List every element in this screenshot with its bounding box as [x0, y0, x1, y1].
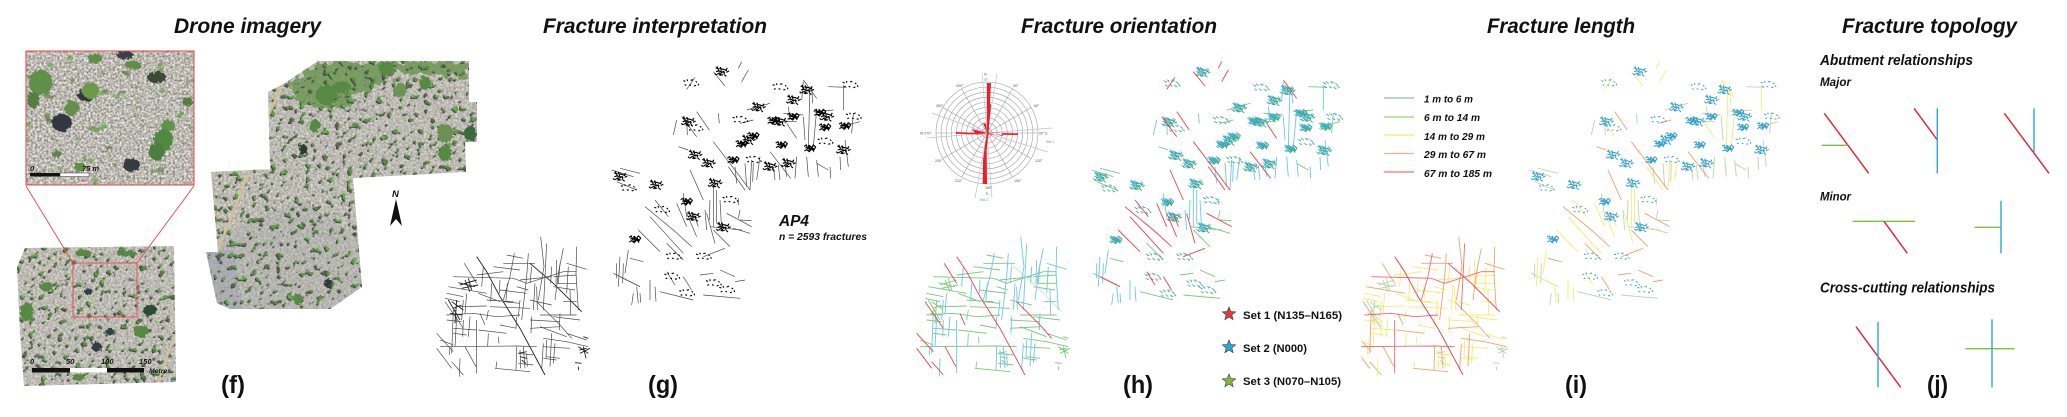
scale bar: lower mosaic: 150 — [139, 357, 152, 366]
legend: fracture sets: Set 2 (N000) — [1243, 343, 1307, 355]
image: zoomed inset — [26, 51, 194, 185]
panel label i: (i) — [1565, 371, 1587, 399]
fracture map: black lines — [437, 62, 861, 377]
rose diagram: 330° — [956, 84, 964, 88]
legend: length classes: 29 m to 67 m — [1423, 149, 1486, 161]
diagram: minor abutment 1 — [1853, 221, 1915, 253]
scale bar: lower mosaic: Metres — [149, 368, 171, 375]
rose diagram: 150° — [1014, 179, 1022, 183]
rose diagram: N — [984, 72, 987, 76]
icon: north arrow: N — [392, 189, 400, 200]
scale bar: lower mosaic: 50 — [66, 357, 75, 366]
diagram: cross-cutting 2 — [1965, 319, 2015, 387]
rose diagram: 90° E — [1039, 132, 1048, 136]
image: upper drone mosaic — [200, 55, 485, 315]
legend: length classes: 6 m to 14 m — [1424, 112, 1480, 124]
panel label j: (j) — [1927, 371, 1948, 399]
rose diagram: Set 2 — [980, 198, 988, 202]
legend: length classes — [1384, 94, 1492, 180]
icon: north arrow — [390, 189, 402, 226]
subheading: cross-cutting relationships: Cross-cutting relationships — [1820, 280, 1995, 296]
diagram: major abutment 3 — [2004, 108, 2049, 173]
heading: fracture topology: Fracture topology — [1842, 15, 2018, 38]
panel label g: (g) — [648, 371, 678, 399]
fracture map: coloured by length — [1355, 62, 1779, 377]
legend: fracture sets: Set 3 (N070–N105) — [1243, 376, 1341, 388]
zoom box and connector lines — [26, 186, 194, 317]
legend: fracture sets: Set 1 (N135–N165) — [1243, 310, 1342, 322]
heading: drone imagery: Drone imagery — [174, 15, 322, 38]
panel: fracture length — [1355, 62, 1779, 399]
panel: fracture topology — [1819, 53, 2049, 399]
panel: fracture interpretation — [437, 62, 867, 399]
fracture map: coloured by set — [917, 62, 1343, 377]
panel label f: (f) — [221, 371, 245, 399]
scale bar: inset: 75 m — [82, 164, 99, 173]
heading: fracture length: Fracture length — [1487, 15, 1635, 38]
rose diagram: 30° — [1013, 84, 1019, 88]
diagram: cross-cutting 1 — [1856, 322, 1901, 387]
panel: drone imagery — [15, 51, 485, 399]
rose diagram: 300° — [936, 104, 944, 108]
subheading: abutment relationships: Abutment relationships — [1819, 53, 1973, 69]
diagram: minor abutment 2 — [1975, 201, 2001, 253]
scale bar: inset — [30, 164, 99, 176]
diagram: major abutment 1 — [1822, 113, 1869, 173]
heading: fracture orientation: Fracture orientation — [1021, 15, 1217, 38]
scale bar: lower mosaic — [30, 357, 171, 375]
rose diagram: W 270° — [920, 132, 932, 136]
subheading: major: Major — [1820, 77, 1852, 89]
panel label h: (h) — [1123, 371, 1153, 399]
scale bar: inset: 0 — [30, 164, 35, 173]
rose diagram: 0° — [984, 78, 988, 82]
fracture count: n = 2593 fractures — [779, 232, 867, 243]
panel: fracture orientation — [917, 62, 1343, 399]
rose diagram: 180° — [985, 186, 993, 190]
legend: length classes: 67 m to 185 m — [1424, 168, 1492, 180]
rose diagram: 60° — [1034, 104, 1040, 108]
legend: length classes: 1 m to 6 m — [1424, 94, 1473, 106]
scale bar: lower mosaic: 0 — [30, 357, 35, 366]
rose diagram — [920, 72, 1054, 202]
rose diagram: Set 1 — [1046, 140, 1054, 144]
rose diagram: 240° — [935, 159, 943, 163]
legend: fracture sets — [1222, 307, 1342, 388]
rose diagram: 210° — [955, 179, 963, 183]
scale bar: lower mosaic: 100 — [101, 357, 114, 366]
legend: length classes: 14 m to 29 m — [1424, 131, 1485, 143]
inset frame — [26, 51, 194, 185]
rose diagram: 120° — [1035, 159, 1043, 163]
rose diagram: S — [986, 192, 988, 196]
subheading: minor: Minor — [1820, 192, 1852, 204]
site label: AP4: AP4 — [778, 213, 809, 230]
image: lower drone mosaic — [15, 244, 179, 388]
diagram: major abutment 2 — [1914, 108, 1937, 173]
heading: fracture interpretation: Fracture interpretation — [543, 15, 767, 38]
